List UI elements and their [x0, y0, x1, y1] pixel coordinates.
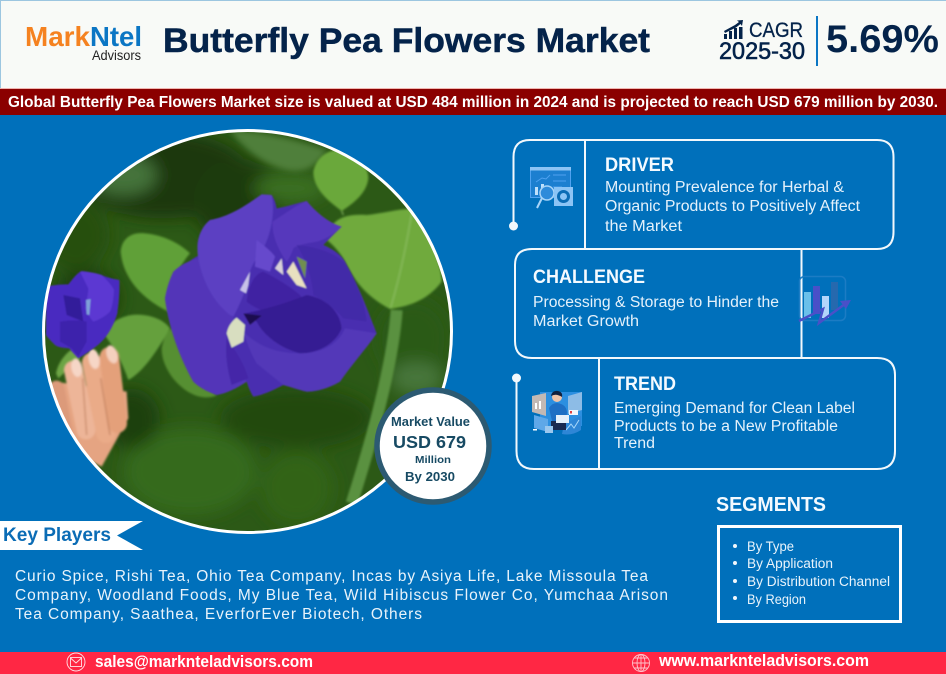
key players ribbon: Key Players [3, 525, 111, 546]
challenge text: Processing & Storage to Hinder the [533, 294, 779, 311]
right flower [165, 194, 377, 397]
hand [54, 344, 128, 467]
challenge text [533, 294, 779, 330]
market value badge: Market Value [391, 415, 470, 429]
key players list: Company, Woodland Foods, My Blue Tea, Wild Hibiscus Flower Co, Yumchaa Arison [15, 587, 668, 604]
headline banner [0, 88, 946, 115]
title: Butterfly Pea Flowers Market [163, 22, 650, 60]
logo: MarkNtel Advisors [25, 21, 142, 63]
key players list: Curio Spice, Rishi Tea, Ohio Tea Company, Incas by Asiya Life, Lake Missoula Tea [15, 568, 648, 585]
key players ribbon [0, 521, 143, 550]
key players list [15, 568, 668, 623]
icon: email [67, 653, 85, 671]
market value badge [377, 390, 489, 502]
panel: driver [509, 155, 861, 235]
panel: trend [512, 374, 855, 452]
segments box [718, 526, 900, 622]
trend text [614, 400, 855, 452]
background blurs [37, 132, 450, 525]
panel: challenge [533, 267, 851, 330]
left flower [46, 271, 119, 358]
CAGR block: 5.69% [826, 18, 939, 61]
photo: butterfly pea flowers [30, 125, 460, 538]
CAGR block: 2025-30 [719, 38, 805, 65]
driver text [605, 179, 861, 235]
driver text: Mounting Prevalence for Herbal & [605, 179, 845, 196]
trend text: Emerging Demand for Clean Label [614, 400, 855, 417]
CAGR block [719, 16, 939, 66]
CAGR block: CAGR [749, 19, 803, 42]
challenge text: Market Growth [533, 313, 639, 330]
flower centres [227, 318, 245, 348]
connector frame: driver, challenge, trend [514, 140, 895, 469]
segments box: By Application [747, 556, 833, 571]
trend text: Trend [614, 435, 655, 452]
segments heading: SEGMENTS [716, 494, 826, 516]
header band [0, 0, 946, 89]
panel: challenge: CHALLENGE [533, 267, 645, 288]
panel: trend: TREND [614, 374, 676, 395]
key players list: Tea Company, Saathea, EverforEver Biotech, Others [15, 606, 422, 623]
segments box: By Distribution Channel [747, 574, 890, 589]
icon: bar chart with arrow [799, 276, 851, 323]
driver text: Organic Products to Positively Affect [605, 198, 861, 215]
market value badge: Million [415, 454, 451, 466]
segments box: By Type [747, 539, 794, 554]
market value badge: By 2030 [405, 470, 455, 484]
icon: growth chart [724, 20, 743, 39]
icon: analytics dashboard [530, 167, 573, 208]
icon: analyst with screens [532, 391, 582, 434]
footer band: sales@marknteladvisors.com [95, 653, 313, 671]
footer band: www.marknteladvisors.com [658, 652, 869, 670]
logo: MarkNtel Advisors: Advisors [92, 48, 141, 63]
logo: MarkNtel Advisors: Ntel [90, 21, 142, 52]
headline banner: Global Butterfly Pea Flowers Market size is valued at USD 484 million in 2024 and is projected to reach USD 679 million by 2030. [8, 94, 938, 111]
panel: driver: DRIVER [605, 155, 674, 176]
footer band [0, 652, 946, 674]
segments box: By Region [747, 592, 806, 607]
icon: globe [632, 654, 650, 672]
trend text: Products to be a New Profitable [614, 418, 838, 435]
leaves [56, 150, 442, 503]
driver text: the Market [605, 218, 683, 235]
market value badge: USD 679 [393, 432, 466, 452]
logo: MarkNtel Advisors: Mark [25, 21, 90, 52]
